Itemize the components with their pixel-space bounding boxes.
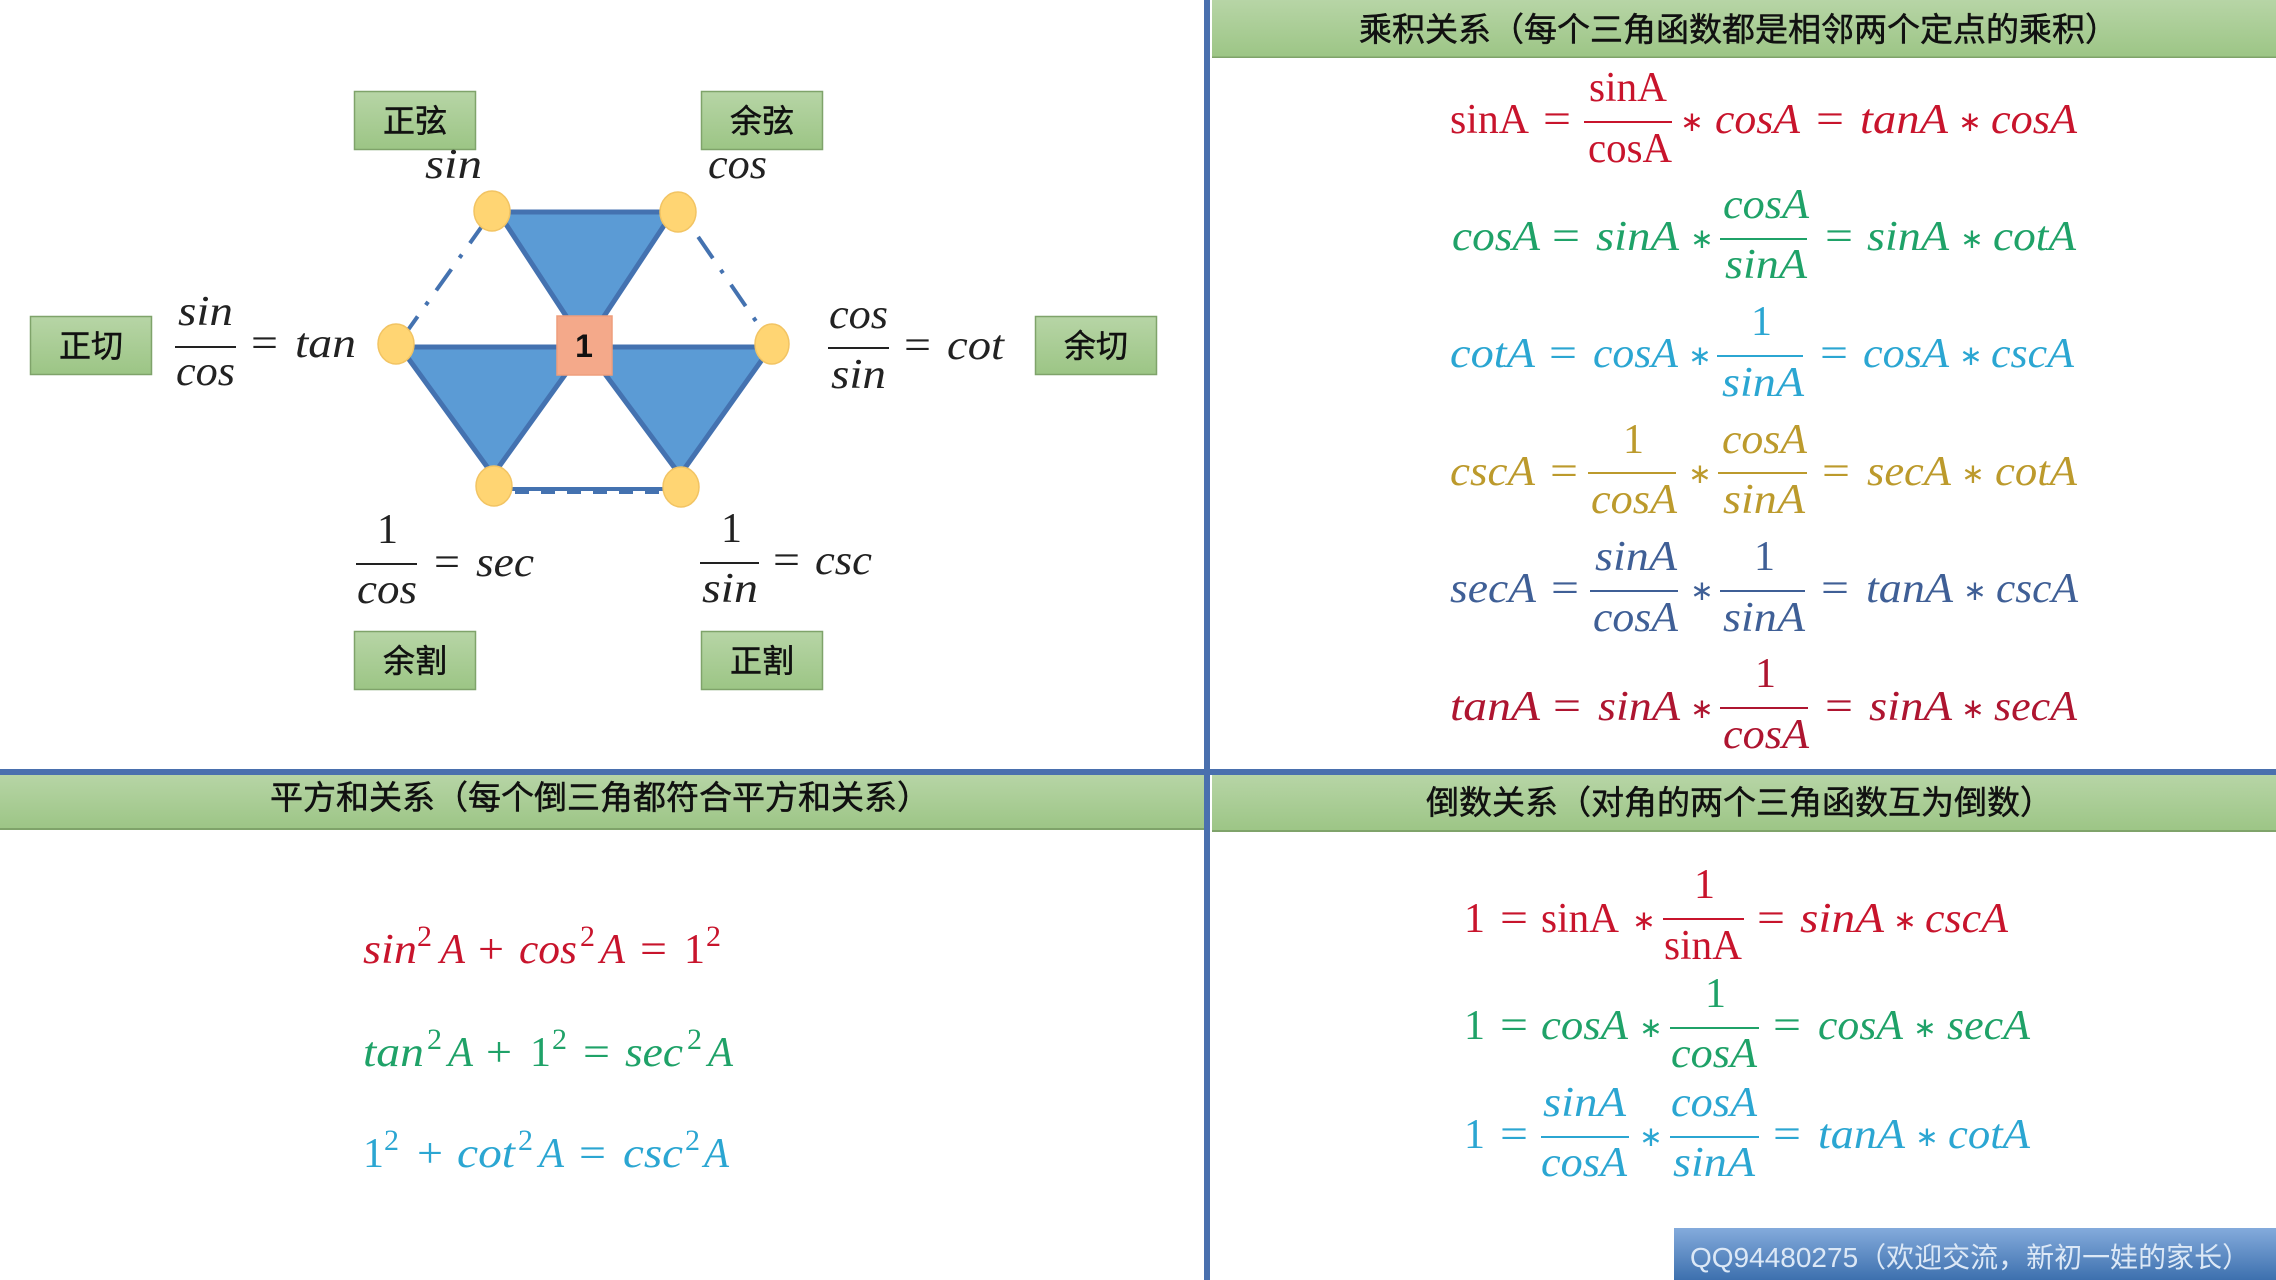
equation: 1 = tanA x cotA: cosA (1541, 1140, 1627, 1186)
equation: sin squared plus cos squared: A (437, 927, 465, 973)
equation: one plus cot squared: A (701, 1131, 729, 1177)
label: tangent: 正切 (59, 328, 123, 364)
equation: tan squared plus one: 1 (530, 1030, 551, 1076)
equation: sinA: = (1543, 97, 1571, 143)
equation: 1 = sinA x cscA: = (1500, 896, 1528, 942)
equation: sin squared plus cos squared: A (597, 927, 625, 973)
equation: cotA: = (1549, 331, 1577, 377)
label: cosecant: 正割 (730, 643, 794, 679)
equation: 1 = cosA x secA: ∗ (1913, 1011, 1937, 1044)
equation: cotA: cotA (1450, 331, 1535, 377)
formula: 1 over cos equals sec: = (434, 540, 460, 586)
label: sine: 正弦 (383, 103, 447, 139)
equation: one plus cot squared: cot (457, 1131, 517, 1177)
vertex names: cos (708, 142, 767, 188)
vertex names (425, 142, 767, 188)
hexagon dashed outline (408, 222, 762, 492)
equation: cotA: ∗ (1959, 339, 1983, 372)
formula: cos over sin equals cot (828, 292, 1005, 398)
equation: tan squared plus one (363, 1023, 733, 1076)
equation: cscA: = (1550, 449, 1578, 495)
equation: 1 = tanA x cotA: = (1500, 1112, 1528, 1158)
equation: cotA: cscA (1991, 331, 2074, 377)
formula: sin over cos equals tan: = (251, 321, 278, 367)
equation: cotA: 1 (1751, 299, 1772, 345)
equation: 1 = sinA x cscA: ∗ (1632, 904, 1656, 937)
watermark banner (1674, 1228, 2276, 1280)
equation: cscA: cotA (1995, 449, 2077, 495)
equation: tanA: ∗ (1961, 692, 1985, 725)
label: secant (354, 632, 476, 690)
equation: 1 = tanA x cotA (1464, 1080, 2030, 1186)
equation: sin squared plus cos squared: sin (363, 927, 417, 973)
equation: 1 = cosA x secA (1464, 971, 2030, 1077)
watermark banner: QQ94480275（欢迎交流，新初一娃的家长） (1690, 1242, 2250, 1273)
equation: sinA: ∗ (1958, 105, 1982, 138)
equation: cotA: = (1820, 331, 1848, 377)
equation: cosA (1452, 182, 2076, 288)
equation: cosA: = (1825, 214, 1853, 260)
equation: 1 = sinA x cscA: = (1757, 896, 1785, 942)
equation: sinA: cosA (1715, 97, 1800, 143)
equation: secA: tanA (1866, 566, 1953, 612)
equation: one plus cot squared: 1 (363, 1131, 384, 1177)
equation: tan squared plus one: A (445, 1030, 473, 1076)
formula: sin over cos equals tan (175, 289, 356, 395)
equation: tan squared plus one: A (705, 1030, 733, 1076)
equation: sinA: cosA (1991, 97, 2077, 143)
panel: reciprocal relations (1212, 775, 2276, 1186)
equation: cosA: cosA (1723, 182, 1809, 228)
blue triangles (400, 212, 771, 475)
formula: cos over sin equals cot: = (904, 323, 931, 369)
equation: sinA (1450, 65, 2077, 172)
equation: 1 = tanA x cotA: sinA (1673, 1140, 1755, 1186)
equation: secA: cosA (1593, 595, 1678, 641)
equation: 1 = cosA x secA: 1 (1705, 971, 1726, 1017)
equation: cscA: cosA (1591, 477, 1677, 523)
formula: sin over cos equals tan: cos (176, 349, 235, 395)
equation: one plus cot squared: = (579, 1131, 606, 1177)
formula: 1 over cos equals sec (356, 507, 534, 613)
equation: one plus cot squared (363, 1124, 729, 1177)
equation: sinA: sinA (1589, 65, 1668, 111)
equation: tanA: 1 (1755, 651, 1776, 697)
equation: 1 = sinA x cscA (1464, 862, 2008, 969)
formula: 1 over sin equals csc: csc (815, 538, 872, 584)
equation: one plus cot squared: 2 (518, 1124, 533, 1157)
equation: cscA (1450, 417, 2077, 523)
equation: secA (1450, 534, 2078, 641)
equation: tan squared plus one: 2 (427, 1023, 442, 1056)
equation: 1 = tanA x cotA: 1 (1464, 1112, 1485, 1158)
formula: 1 over sin equals csc (700, 506, 872, 612)
equation: cotA: cosA (1863, 331, 1949, 377)
equation: 1 = sinA x cscA: sinA (1664, 923, 1743, 969)
label: cotangent: 余切 (1064, 328, 1128, 364)
equation: one plus cot squared: + (417, 1131, 443, 1177)
formula: 1 over cos equals sec: 1 (377, 507, 398, 553)
label: tangent (30, 316, 152, 374)
heading: reciprocal relations: 倒数关系（对角的两个三角函数互为倒数） (1426, 784, 2053, 821)
equation: tanA: sinA (1869, 684, 1952, 730)
equation: cscA: ∗ (1961, 457, 1985, 490)
equation: sinA: ∗ (1680, 105, 1704, 138)
equation: cosA: ∗ (1960, 222, 1984, 255)
panel: hexagon mnemonic diagram (30, 92, 1156, 690)
equation: sin squared plus cos squared: 2 (706, 920, 721, 953)
equation: cotA: cosA (1593, 331, 1678, 377)
centre node 1: 1 (575, 328, 593, 364)
panel: product relations (1212, 0, 2276, 758)
formula: sin over cos equals tan: sin (178, 289, 233, 335)
equation: cscA: = (1822, 449, 1850, 495)
formula: 1 over cos equals sec: sec (476, 540, 534, 586)
equation: cosA: cotA (1993, 214, 2076, 260)
formula: cos over sin equals cot: sin (831, 352, 886, 398)
heading: product relations: 乘积关系（每个三角函数都是相邻两个定点的乘积） (1359, 11, 2118, 48)
equation: 1 = tanA x cotA: sinA (1543, 1080, 1626, 1126)
equation: sin squared plus cos squared: cos (519, 927, 577, 973)
equation: 1 = cosA x secA: = (1500, 1003, 1528, 1049)
equation: cotA: ∗ (1688, 339, 1712, 372)
equation: cscA: secA (1867, 449, 1951, 495)
equation: 1 = sinA x cscA: 1 (1464, 896, 1485, 942)
formula: 1 over cos equals sec: cos (357, 567, 417, 613)
equation: one plus cot squared: 2 (384, 1124, 399, 1157)
equation: sin squared plus cos squared: 1 (684, 927, 705, 973)
equation: sin squared plus cos squared: = (640, 927, 667, 973)
formula: cos over sin equals cot: cos (829, 292, 888, 338)
equation: cosA: sinA (1596, 214, 1679, 260)
equation: tan squared plus one: sec (625, 1030, 683, 1076)
equation: secA: = (1821, 566, 1849, 612)
equation: 1 = tanA x cotA: ∗ (1639, 1120, 1663, 1153)
equation: tan squared plus one: = (583, 1030, 610, 1076)
equation: 1 = cosA x secA: cosA (1671, 1031, 1757, 1077)
equation: tanA: tanA (1450, 684, 1540, 730)
equation: 1 = sinA x cscA: 1 (1694, 862, 1715, 908)
equation: cosA: ∗ (1690, 222, 1714, 255)
equation: 1 = tanA x cotA: tanA (1818, 1112, 1905, 1158)
label: cosine: 余弦 (730, 103, 794, 139)
equation: cosA: = (1552, 214, 1580, 260)
equation: secA: cscA (1996, 566, 2078, 612)
equation: sinA: sinA (1450, 97, 1530, 143)
equation: sinA: cosA (1588, 126, 1673, 172)
equation: tanA (1450, 651, 2077, 758)
equation: tan squared plus one: tan (363, 1030, 424, 1076)
equation: tanA: secA (1994, 684, 2077, 730)
equation: secA: sinA (1723, 595, 1805, 641)
equation: tanA: cosA (1723, 712, 1809, 758)
equation: sin squared plus cos squared: + (478, 927, 504, 973)
label: cosine (702, 92, 822, 150)
equation: 1 = tanA x cotA: = (1773, 1112, 1801, 1158)
panel: square relations (0, 774, 1205, 1177)
equation: sinA: = (1816, 97, 1844, 143)
formula: 1 over sin equals csc: sin (702, 566, 758, 612)
equation: one plus cot squared: A (536, 1131, 564, 1177)
formula: sin over cos equals tan: tan (295, 321, 356, 367)
equation: one plus cot squared: csc (623, 1131, 683, 1177)
heading: square relations (0, 774, 1205, 830)
label: sine (354, 92, 476, 150)
label: cotangent (1036, 316, 1156, 374)
equation: 1 = cosA x secA: 1 (1464, 1003, 1485, 1049)
equation: secA: = (1551, 566, 1579, 612)
equation: 1 = cosA x secA: cosA (1541, 1003, 1628, 1049)
equation: secA: sinA (1595, 534, 1677, 580)
label: secant: 余割 (383, 643, 447, 679)
equation: cotA (1450, 299, 2074, 406)
equation: tan squared plus one: 2 (687, 1023, 702, 1056)
equation: cosA: cosA (1452, 214, 1540, 260)
equation: cscA: cosA (1722, 417, 1807, 463)
equation: one plus cot squared: 2 (685, 1124, 700, 1157)
heading: product relations (1212, 0, 2276, 58)
equation: 1 = tanA x cotA: ∗ (1915, 1120, 1939, 1153)
equation: cosA: sinA (1725, 242, 1807, 288)
equation: cotA: sinA (1722, 360, 1804, 406)
heading: reciprocal relations (1212, 775, 2276, 832)
heading: square relations: 平方和关系（每个倒三角都符合平方和关系） (270, 779, 930, 816)
equation: tanA: sinA (1598, 684, 1680, 730)
equation: 1 = sinA x cscA: sinA (1800, 896, 1884, 942)
vertex nodes (378, 191, 789, 507)
equation: 1 = cosA x secA: = (1773, 1003, 1801, 1049)
equation: sinA: tanA (1860, 97, 1948, 143)
equation: tanA: = (1553, 684, 1581, 730)
equation: 1 = cosA x secA: secA (1947, 1003, 2030, 1049)
equation: tanA: = (1825, 684, 1853, 730)
formula: 1 over sin equals csc: 1 (721, 506, 742, 552)
equation: tan squared plus one: 2 (552, 1023, 567, 1056)
equation: sin squared plus cos squared (363, 920, 721, 973)
equation: sin squared plus cos squared: 2 (580, 920, 595, 953)
equation: 1 = tanA x cotA: cosA (1671, 1080, 1757, 1126)
equation: secA: ∗ (1690, 574, 1714, 607)
equation: secA: secA (1450, 566, 1536, 612)
equation: cscA: 1 (1623, 417, 1644, 463)
formula: 1 over sin equals csc: = (773, 538, 800, 584)
equation: 1 = tanA x cotA: cotA (1948, 1112, 2030, 1158)
equation: 1 = sinA x cscA: sinA (1541, 896, 1620, 942)
equation: 1 = cosA x secA: cosA (1818, 1003, 1903, 1049)
equation: sin squared plus cos squared: 2 (417, 920, 432, 953)
equation: secA: 1 (1754, 534, 1775, 580)
formula: cos over sin equals cot: cot (947, 323, 1005, 369)
equation: cosA: sinA (1867, 214, 1949, 260)
equation: tan squared plus one: + (486, 1030, 512, 1076)
equation: 1 = cosA x secA: ∗ (1639, 1011, 1663, 1044)
equation: cscA: cscA (1450, 449, 1535, 495)
equation: 1 = sinA x cscA: ∗ (1893, 904, 1917, 937)
equation: cscA: ∗ (1688, 457, 1712, 490)
equation: secA: ∗ (1963, 574, 1987, 607)
equation: 1 = sinA x cscA: cscA (1925, 896, 2008, 942)
equation: tanA: ∗ (1690, 692, 1714, 725)
centre node 1 (557, 316, 612, 375)
label: cosecant (702, 632, 822, 690)
vertex names: sin (425, 142, 482, 188)
equation: cscA: sinA (1723, 477, 1805, 523)
